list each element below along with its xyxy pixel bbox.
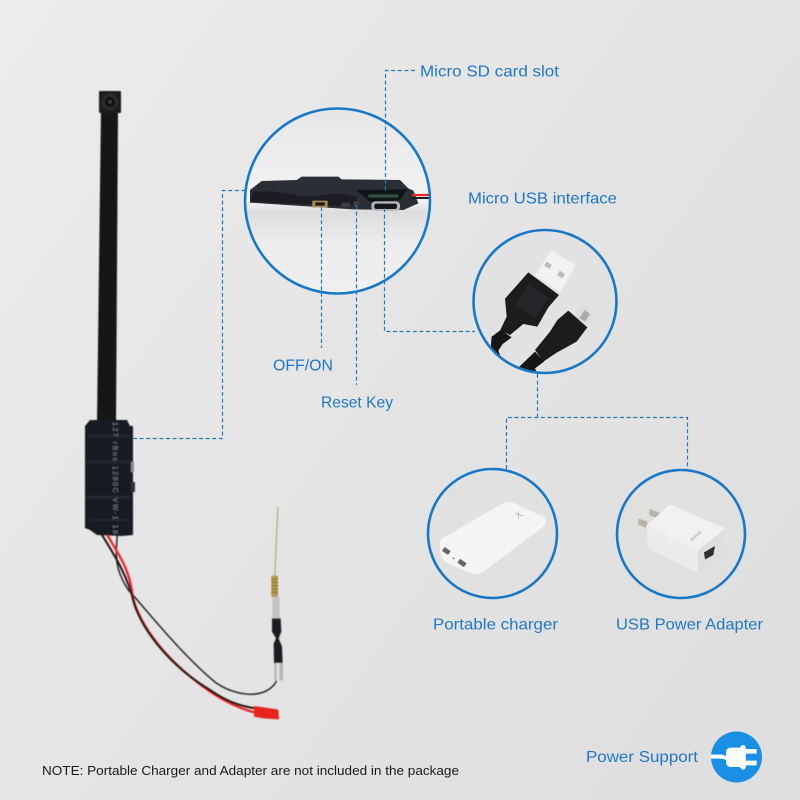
label: Portable charger: Portable charger bbox=[433, 616, 559, 634]
circuit body: 127 rBus 1280C VW-1 18 bbox=[111, 422, 118, 534]
circuit body bbox=[85, 420, 135, 536]
camera head bbox=[99, 91, 121, 113]
circle: USB power adapter: anzeal bbox=[689, 530, 703, 542]
icon: power plug bbox=[711, 732, 762, 782]
close-up of board bbox=[250, 177, 418, 210]
label: Micro USB interface: Micro USB interface bbox=[468, 190, 617, 208]
circle: board close-up bbox=[245, 108, 430, 294]
circle: portable charger bbox=[428, 469, 557, 598]
label: Power Support: Power Support bbox=[586, 749, 699, 766]
label: Reset Key: Reset Key bbox=[321, 394, 393, 412]
label: OFF/ON: OFF/ON bbox=[273, 358, 333, 374]
label: USB Power Adapter: USB Power Adapter bbox=[616, 616, 764, 634]
dashed connector lines bbox=[133, 70, 688, 469]
circle: USB cable bbox=[474, 230, 616, 380]
antenna bbox=[271, 507, 283, 680]
label: Micro SD card slot: Micro SD card slot bbox=[420, 64, 560, 80]
circle: USB power adapter bbox=[617, 470, 745, 598]
USB-A plug bbox=[535, 250, 576, 292]
ribbon strap bbox=[97, 110, 118, 424]
camera module photo bbox=[85, 91, 283, 719]
micro USB plug bbox=[578, 318, 579, 319]
note: NOTE: Portable Charger and Adapter are not included in the package bbox=[42, 764, 459, 778]
wires bbox=[102, 535, 277, 713]
red connector bbox=[254, 706, 279, 719]
